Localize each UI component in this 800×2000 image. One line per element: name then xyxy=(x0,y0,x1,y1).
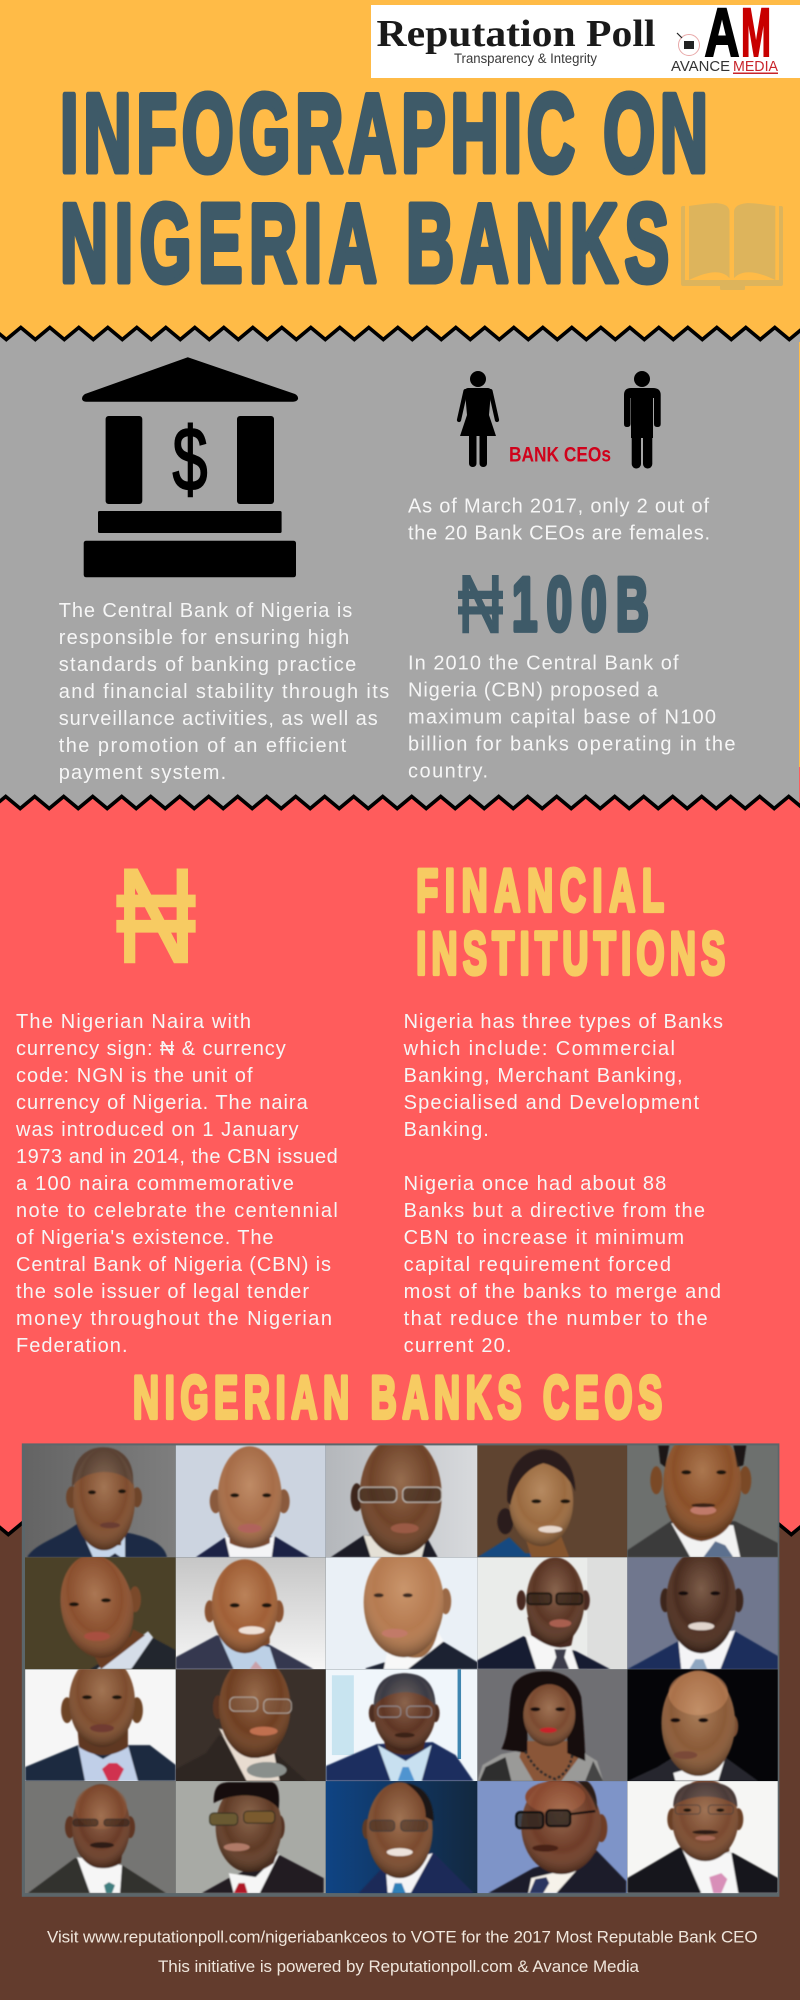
photo: CEO row 2 column 1 xyxy=(25,1557,176,1670)
heading: financial institutions xyxy=(416,858,725,988)
text: naira description: Central Bank of Nigeria (CBN) is xyxy=(16,1254,331,1276)
text: central bank description: responsible for ensuring high xyxy=(59,627,349,649)
logo tagline: Transparency & Integrity xyxy=(454,51,597,66)
text: bank types and consolidation: Banks but a directive from the xyxy=(404,1200,705,1222)
photo: CEO row 4 column 3 xyxy=(326,1781,478,1894)
logo: Avance Media: MEDIA xyxy=(733,58,778,75)
text: central bank description: surveillance activities, as well as xyxy=(59,708,378,730)
photo: CEO row 1 column 2 xyxy=(176,1445,326,1558)
icon: camera xyxy=(677,33,700,56)
panel: central bank xyxy=(0,328,800,827)
text: naira description: a 100 naira commemorative xyxy=(16,1173,294,1195)
photo: CEO row 3 column 4 xyxy=(478,1669,627,1781)
text: bank types and consolidation: Nigeria has three types of Banks xyxy=(404,1011,723,1033)
text: naira description: code: NGN is the unit of xyxy=(16,1065,253,1087)
icon: male figure xyxy=(624,371,661,468)
photo: CEO row 3 column 3 xyxy=(326,1669,478,1781)
text: naira description: Federation. xyxy=(16,1335,128,1357)
photo: CEO row 3 column 1 xyxy=(25,1669,176,1781)
panel: naira and financial institutions xyxy=(0,796,800,1560)
photo: CEO row 4 column 1 xyxy=(25,1781,176,1894)
text: bank types and consolidation: Specialised and Development xyxy=(404,1092,699,1114)
text: naira description: note to celebrate the centennial xyxy=(16,1200,338,1222)
photo: CEO row 2 column 5 xyxy=(627,1557,778,1670)
footer text: This initiative is powered by Reputationpoll.com & Avance Media xyxy=(158,1957,640,1976)
photo: CEO row 4 column 4 xyxy=(477,1781,628,1894)
text: female CEOs: As of March 2017, only 2 out of xyxy=(408,495,709,517)
photo: CEO row 1 column 3 xyxy=(326,1445,478,1558)
logo: Reputation Poll: Reputation Poll xyxy=(376,13,656,55)
title: INFOGRAPHIC ON xyxy=(60,72,708,196)
text: bank types and consolidation: CBN to increase it minimum xyxy=(404,1227,684,1249)
text: central bank description xyxy=(59,600,389,784)
text: naira description: was introduced on 1 January xyxy=(15,1119,298,1141)
photo grid: bank CEOs xyxy=(22,1428,779,1897)
logo box xyxy=(371,0,800,78)
text: central bank description: standards of banking practice xyxy=(59,654,356,676)
text: bank types and consolidation: which include: Commercial xyxy=(403,1038,675,1060)
text: bank types and consolidation: Banking. xyxy=(404,1119,489,1141)
text: capital base: billion for banks operating in the xyxy=(408,733,736,755)
photo: CEO row 2 column 4 xyxy=(477,1557,628,1670)
text: bank types and consolidation: Nigeria once had about 88 xyxy=(404,1173,666,1195)
text: naira description: the sole issuer of legal tender xyxy=(16,1281,309,1303)
panel: header xyxy=(0,0,800,770)
text: central bank description: and financial stability through its xyxy=(59,681,389,703)
text: central bank description: The Central Bank of Nigeria is xyxy=(59,600,352,622)
label: bank CEOs: BANK CEOs xyxy=(509,442,611,466)
icon: bank building xyxy=(82,357,298,577)
text: naira description xyxy=(15,1011,338,1357)
text: naira description: currency sign: ₦ & currency xyxy=(16,1038,286,1060)
logo: Avance Media: AVANCE xyxy=(671,58,730,75)
text: bank types and consolidation: Banking, Merchant Banking, xyxy=(404,1065,683,1087)
photo: CEO row 4 column 5 xyxy=(627,1781,778,1894)
photo: CEO row 1 column 5 xyxy=(628,1445,778,1558)
text: bank types and consolidation: current 20. xyxy=(404,1335,512,1357)
text: bank types and consolidation: that reduce the number to the xyxy=(404,1308,708,1330)
figure: 100 billion naira xyxy=(458,559,649,650)
photo: CEO row 3 column 2 xyxy=(176,1669,326,1781)
text: bank types and consolidation: capital requirement forced xyxy=(404,1254,671,1276)
text: female CEOs xyxy=(408,495,710,544)
title xyxy=(60,72,708,306)
text: naira description: The Nigerian Naira with xyxy=(16,1011,251,1033)
figure: 100 billion naira: ₦ xyxy=(458,559,503,650)
footer text xyxy=(47,1928,758,1976)
heading: financial institutions: FINANCIAL xyxy=(416,858,664,925)
photo: CEO row 3 column 5 xyxy=(628,1669,778,1781)
text: capital base xyxy=(408,652,736,782)
text: central bank description: the promotion of an efficient xyxy=(59,735,347,757)
photo: CEO row 1 column 1 xyxy=(26,1446,176,1558)
footer text: Visit www.reputationpoll.com/nigeriabankceos to VOTE for the 2017 Most Reputable Bank CEO xyxy=(47,1928,758,1947)
text: naira description: of Nigeria's existence. The xyxy=(16,1227,274,1249)
panel: footer background xyxy=(0,1522,800,2000)
logo: Avance Media xyxy=(671,58,778,75)
text: capital base: Nigeria (CBN) proposed a xyxy=(408,679,659,701)
icon: dollar sign: $ xyxy=(172,410,208,510)
heading: financial institutions: INSTITUTIONS xyxy=(416,921,725,988)
title: NIGERIA BANKS xyxy=(60,182,669,306)
text: bank types and consolidation xyxy=(403,1011,723,1357)
icon: female figure xyxy=(459,371,497,467)
text: naira description: currency of Nigeria. The naira xyxy=(16,1092,309,1114)
photo: CEO row 1 column 4 xyxy=(477,1445,628,1558)
photo: CEO row 4 column 2 xyxy=(176,1781,326,1894)
text: central bank description: payment system. xyxy=(59,762,226,784)
text: naira description: money throughout the Nigerian xyxy=(16,1308,332,1330)
icon: naira sign: ₦ xyxy=(116,842,196,991)
heading: Nigerian banks CEOs: NIGERIAN BANKS CEOS xyxy=(133,1365,662,1432)
text: naira description: 1973 and in 2014, the CBN issued xyxy=(16,1146,338,1168)
text: capital base: maximum capital base of N100 xyxy=(408,706,716,728)
text: bank types and consolidation: most of the banks to merge and xyxy=(404,1281,721,1303)
photo: CEO row 2 column 3 xyxy=(326,1557,478,1670)
figure: 100 billion naira: 100B xyxy=(512,563,649,648)
text: capital base: country. xyxy=(408,760,488,782)
icon: open book xyxy=(681,203,783,290)
text: female CEOs: the 20 Bank CEOs are females. xyxy=(408,522,710,544)
photo: CEO row 2 column 2 xyxy=(176,1557,326,1670)
text: capital base: In 2010 the Central Bank of xyxy=(408,652,679,674)
